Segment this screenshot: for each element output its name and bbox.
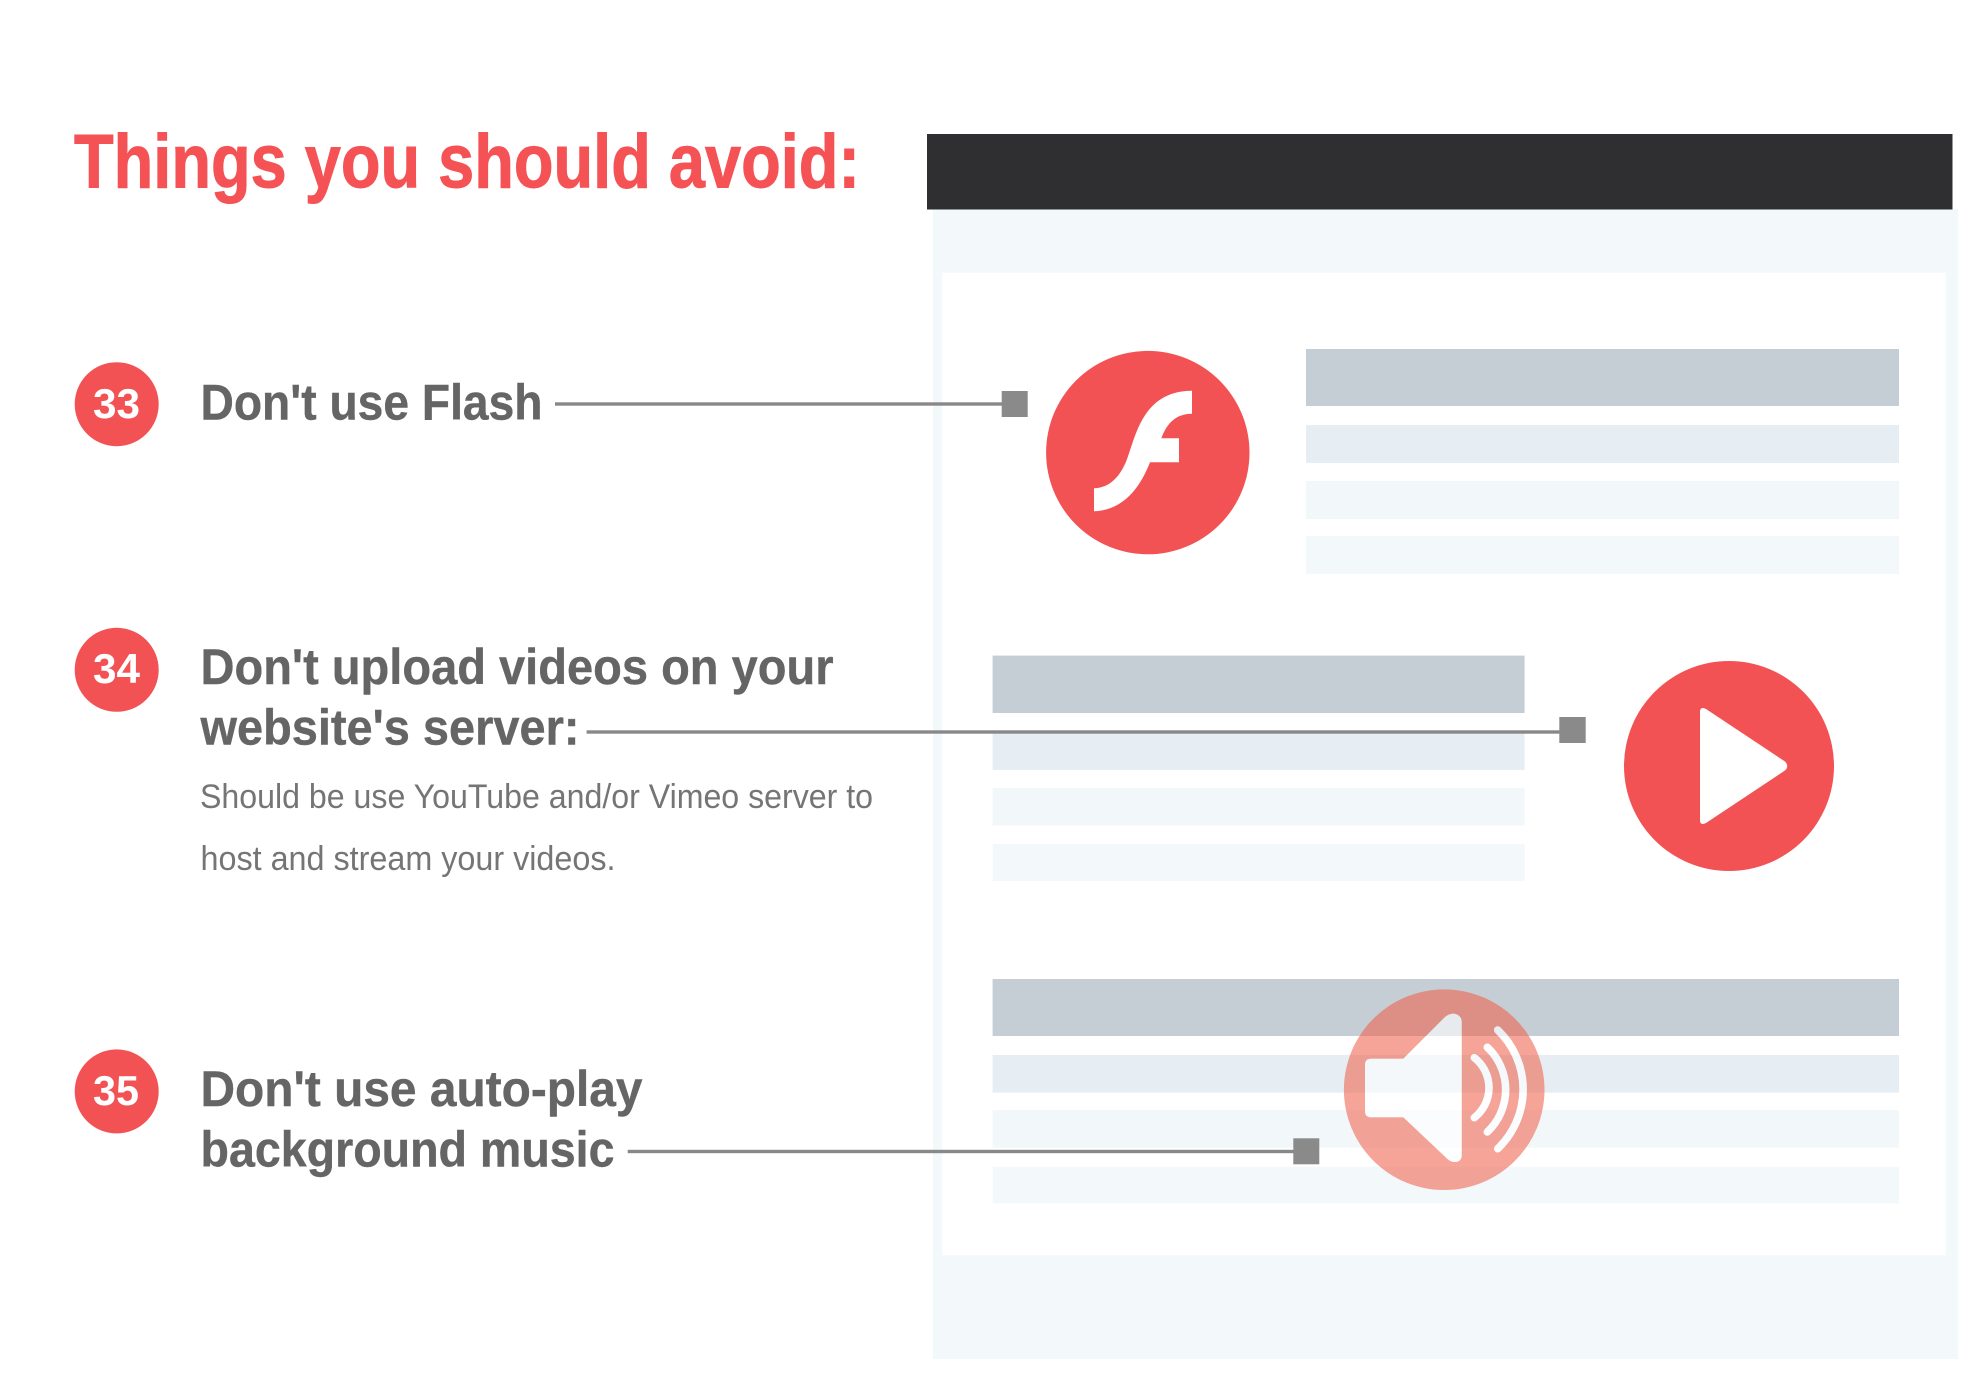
heading: upload videos bbox=[200, 639, 834, 756]
content block: top row placeholders bbox=[1306, 349, 1899, 574]
badge 35 bbox=[75, 1049, 159, 1133]
item 33 bbox=[75, 362, 542, 446]
badge 33 bbox=[75, 362, 159, 446]
icon: flash bbox=[1046, 351, 1250, 554]
description: host and stream your videos. bbox=[200, 840, 616, 878]
heading: upload videos: website's server: bbox=[200, 700, 580, 756]
heading: auto-play music: background music bbox=[200, 1121, 614, 1177]
badge 34 bbox=[75, 628, 159, 712]
connector: videos bbox=[587, 717, 1586, 743]
connector: music bbox=[628, 1138, 1319, 1164]
browser title bar bbox=[927, 134, 1952, 210]
badge 33: 33 bbox=[93, 380, 140, 427]
content block: bottom row placeholders bbox=[993, 979, 1899, 1204]
browser background bbox=[933, 209, 1958, 1359]
heading: auto-play music: Don't use auto-play bbox=[200, 1061, 643, 1117]
heading: flash: Don't use Flash bbox=[200, 374, 542, 430]
item 34 bbox=[75, 628, 873, 878]
item 35 bbox=[75, 1049, 643, 1177]
badge 35: 35 bbox=[93, 1067, 139, 1114]
description: Should be use YouTube and/or Vimeo server to bbox=[200, 778, 873, 816]
icon: speaker bbox=[1344, 989, 1544, 1190]
heading: upload videos: Don't upload videos on your bbox=[200, 639, 834, 695]
badge 34: 34 bbox=[93, 645, 141, 692]
content block: middle row placeholders bbox=[993, 656, 1525, 881]
heading: auto-play music bbox=[200, 1061, 643, 1177]
description bbox=[200, 778, 873, 878]
panel: browser mockup bbox=[927, 134, 1958, 1359]
browser page area bbox=[942, 273, 1946, 1255]
title: Things you should avoid: bbox=[74, 120, 860, 204]
icon: play button bbox=[1624, 661, 1834, 871]
connector: flash bbox=[555, 391, 1028, 417]
